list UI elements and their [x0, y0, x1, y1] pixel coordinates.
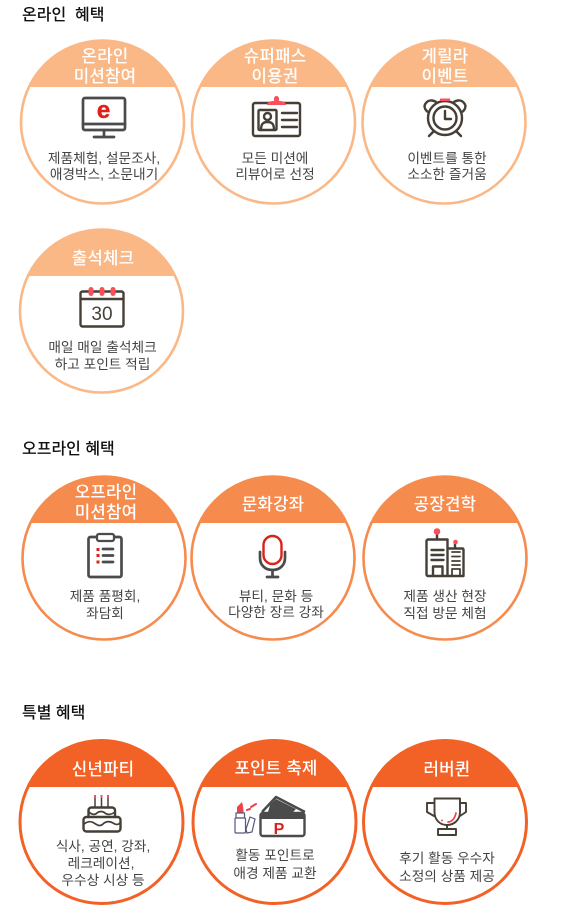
icon: cake — [84, 795, 120, 832]
icon: lipstick and point card — [235, 797, 305, 838]
icon: calendar: 30 — [91, 304, 113, 325]
icon: lipstick and point card: P — [274, 821, 285, 838]
heading: offline benefits: 오프라인 혜택 — [22, 440, 115, 458]
description: 매일 매일 출석체크 — [48, 340, 157, 355]
header band — [27, 229, 176, 276]
description: 하고 포인트 적립 — [55, 357, 150, 372]
icon: id card — [253, 96, 300, 136]
circle outline — [192, 476, 354, 640]
panel: super pass — [192, 40, 355, 203]
icon: monitor: e — [97, 97, 110, 124]
header text: 공장견학 — [414, 495, 476, 514]
description: 모든 미션에 — [242, 151, 308, 166]
heading: online benefits: 온라인 혜택 — [22, 6, 104, 24]
header text: 포인트 축제 — [234, 759, 318, 778]
description: 제품 생산 현장 — [403, 589, 487, 604]
circle outline — [364, 476, 526, 640]
icon: monitor — [83, 97, 125, 137]
header band — [371, 740, 519, 787]
description: 레크레이션, — [68, 856, 134, 871]
icon: alarm clock — [425, 98, 465, 136]
header band — [199, 40, 348, 87]
panel: factory tour — [364, 476, 526, 640]
description: 우수상 시상 등 — [61, 873, 145, 888]
header text: 온라인 — [82, 47, 128, 66]
header text: 슈퍼패스 — [244, 47, 306, 66]
header text: 미션참여 — [74, 67, 136, 86]
panel: offline mission — [22, 476, 186, 640]
description: 다양한 장르 강좌 — [228, 605, 324, 620]
circle outline — [21, 40, 184, 204]
header text: 오프라인 — [75, 483, 137, 502]
description: 이벤트를 통한 — [407, 151, 487, 166]
description: 애경 제품 교환 — [233, 866, 317, 881]
description: 제품체험, 설문조사, — [48, 151, 160, 166]
panel: attendance check — [20, 229, 183, 392]
header text: 이용권 — [252, 67, 298, 86]
panel: online mission — [21, 40, 184, 204]
header band — [200, 740, 349, 787]
header band — [28, 40, 177, 87]
circle outline — [192, 40, 355, 204]
header text: 러버퀸 — [424, 760, 470, 779]
header text: 신년파티 — [72, 760, 134, 779]
header band — [371, 476, 519, 523]
description: 후기 활동 우수자 — [399, 851, 495, 866]
description: 활동 포인트로 — [235, 848, 315, 863]
panel: new year party — [20, 740, 183, 904]
header text: 미션참여 — [75, 503, 137, 522]
circle outline — [193, 740, 356, 904]
circle outline — [20, 230, 183, 392]
panel: point festival — [193, 740, 356, 904]
header band — [370, 40, 518, 87]
description: 뷰티, 문화 등 — [239, 589, 313, 604]
description: 식사, 공연, 강좌, — [56, 839, 150, 854]
icon: microphone — [260, 536, 285, 577]
description: 애경박스, 소문내기 — [50, 167, 158, 182]
icon: clipboard — [88, 534, 122, 577]
panel: guerrilla event — [362, 40, 526, 203]
header band — [27, 740, 176, 787]
circle outline — [362, 40, 526, 204]
icon: trophy — [427, 798, 466, 835]
description: 제품 품평회, — [70, 589, 140, 604]
panel: culture lecture — [192, 476, 354, 640]
icon: calendar — [80, 287, 124, 326]
header text: 이벤트 — [422, 67, 468, 86]
header text: 문화강좌 — [242, 495, 304, 514]
description: 좌담회 — [86, 606, 124, 621]
header text: 출석체크 — [72, 249, 134, 268]
description: 소정의 상품 제공 — [399, 869, 495, 884]
circle outline — [364, 740, 526, 904]
icon: buildings — [426, 528, 464, 576]
panel: reviewer queen — [364, 740, 526, 904]
circle outline — [20, 740, 183, 904]
description: 소소한 즐거움 — [407, 167, 487, 182]
header band — [199, 476, 347, 523]
circle outline — [22, 476, 186, 640]
header band — [30, 476, 178, 523]
description: 리뷰어로 선정 — [235, 167, 315, 182]
description: 직접 방문 체험 — [403, 606, 487, 621]
heading: special benefits: 특별 혜택 — [22, 704, 85, 722]
header text: 게릴라 — [422, 47, 468, 66]
